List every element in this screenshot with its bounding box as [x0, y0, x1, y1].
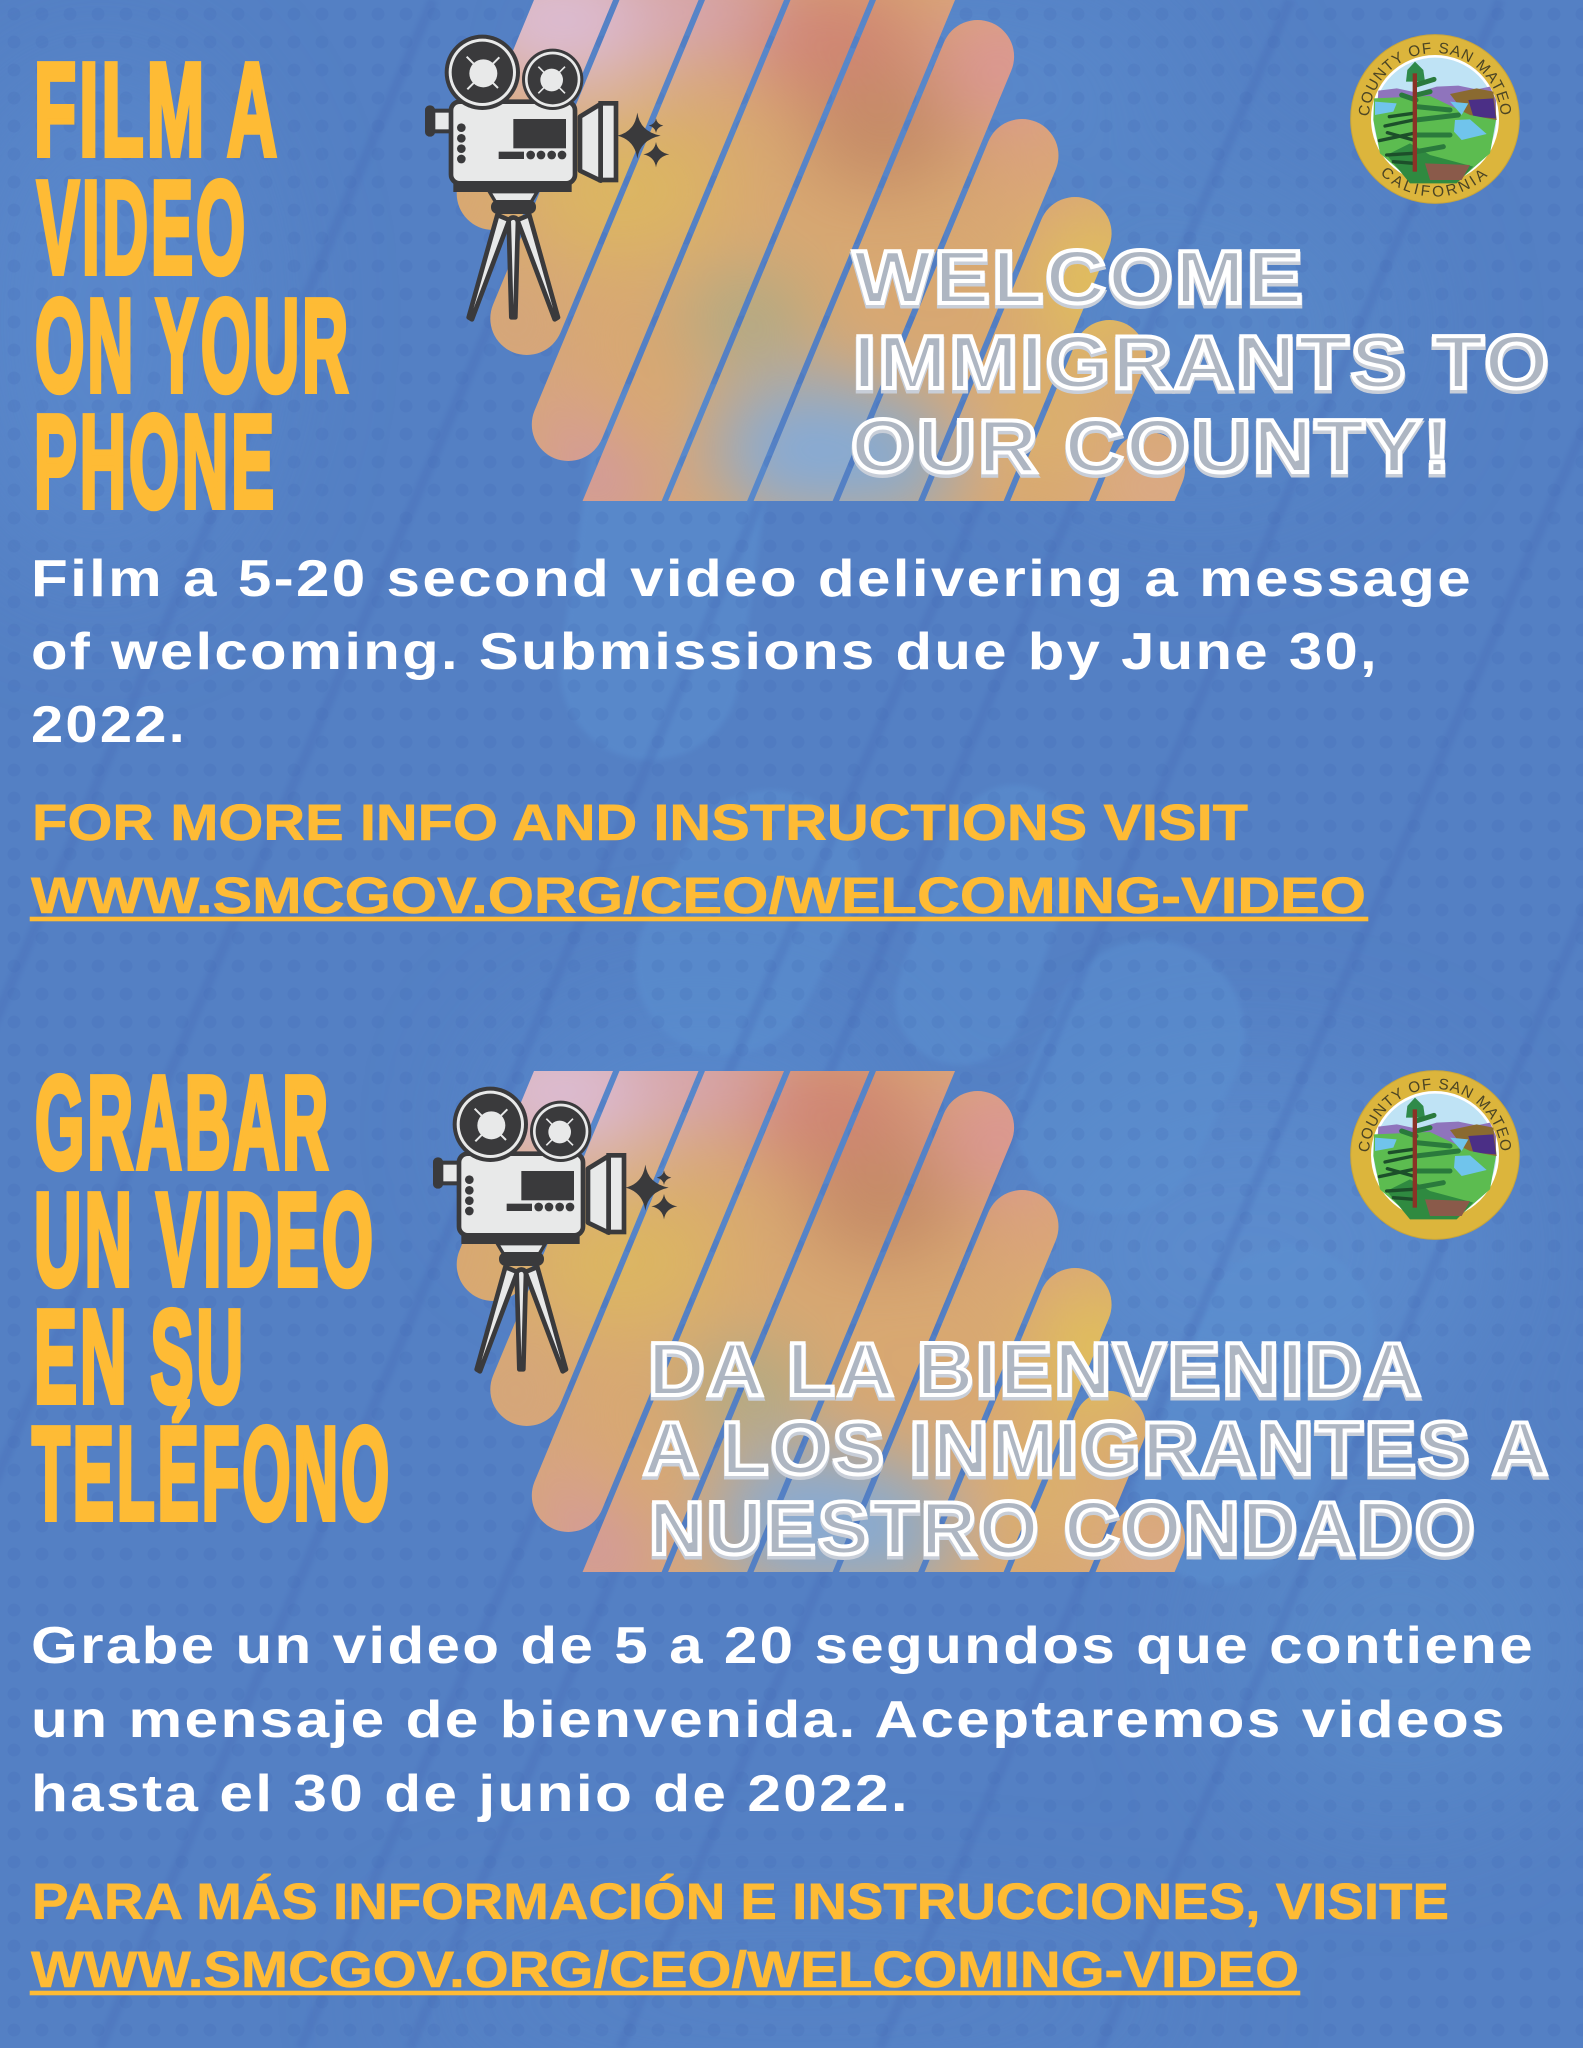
icon: movie camera bottom	[433, 1087, 677, 1371]
heading: da la bienvenida a los inmigrantes a nuestro condado: NUESTRO CONDADO	[649, 1489, 1477, 1573]
title: film a video on your phone: PHONE	[34, 388, 277, 535]
heading: welcome immigrants to our county: OUR COUNTY!	[851, 404, 1453, 488]
title: grabar un video en su telefono: EN SU	[34, 1283, 246, 1430]
info text: english: FOR MORE INFO AND INSTRUCTIONS VISIT	[32, 794, 1248, 851]
heading: welcome immigrants to our county: OUR COUNTY!	[851, 407, 1453, 491]
seal: county of san mateo top	[1350, 34, 1520, 204]
heading: welcome immigrants to our county: IMMIGRANTS TO	[853, 323, 1551, 407]
seal text: california: CALIFORNIA	[1269, 1043, 1391, 1060]
body text: english: Film a 5-20 second video delivering a message	[31, 550, 1473, 608]
heading: welcome immigrants to our county: WELCOME	[853, 238, 1305, 322]
seal text: county of san mateo: COUNTY OF SAN MATEO	[1358, 42, 1511, 116]
body text: spanish: un mensaje de bienvenida. Aceptaremos videos	[31, 1691, 1507, 1749]
body text: spanish	[31, 1617, 1535, 1823]
title: film a video on your phone: FILM A	[34, 36, 280, 183]
text: TELÉFONO	[32, 1400, 392, 1547]
heading: welcome immigrants to our county	[851, 235, 1551, 491]
link: english url: WWW.SMCGOV.ORG/CEO/WELCOMING-VIDEO	[31, 867, 1366, 924]
heading: welcome immigrants to our county: IMMIGRANTS TO	[853, 320, 1551, 404]
body text: english	[31, 550, 1473, 754]
heading: da la bienvenida a los inmigrantes a nuestro condado: A LOS INMIGRANTES A	[643, 1406, 1550, 1490]
heading: da la bienvenida a los inmigrantes a nuestro condado	[643, 1327, 1550, 1573]
title: grabar un video en su telefono: GRABAR	[35, 1049, 331, 1196]
body text: english: 2022.	[31, 696, 187, 754]
title: film a video on your phone	[34, 36, 351, 535]
text: ON YOUR	[35, 272, 351, 419]
stripes graphic: bottom	[404, 1021, 1254, 1601]
body text: english: of welcoming. Submissions due by June 30,	[31, 623, 1379, 681]
body text: spanish: hasta el 30 de junio de 2022.	[31, 1765, 910, 1823]
seal text: california: CALIFORNIA	[1382, 168, 1488, 197]
seal text: county of san mateo: COUNTY OF SAN MATEO	[1358, 1078, 1511, 1152]
heading: da la bienvenida a los inmigrantes a nuestro condado: NUESTRO CONDADO	[649, 1486, 1477, 1570]
body text: spanish: Grabe un video de 5 a 20 segundos que contiene	[31, 1617, 1535, 1675]
info text: spanish: PARA MÁS INFORMACIÓN E INSTRUCCIONES, VISITE	[32, 1873, 1449, 1930]
heading: da la bienvenida a los inmigrantes a nuestro condado: DA LA BIENVENIDA	[648, 1330, 1423, 1414]
link: spanish url: WWW.SMCGOV.ORG/CEO/WELCOMING-VIDEO	[31, 1941, 1299, 1998]
title: grabar un video en su telefono: UN VIDEO	[34, 1166, 376, 1313]
heading: da la bienvenida a los inmigrantes a nuestro condado: A LOS INMIGRANTES A	[643, 1409, 1550, 1493]
title: grabar un video en su telefono	[32, 1049, 392, 1547]
seal: county of san mateo bottom	[1350, 1070, 1520, 1240]
heading: welcome immigrants to our county: WELCOME	[853, 235, 1305, 319]
stripes graphic: top	[404, 0, 1254, 530]
icon: movie camera top	[425, 35, 669, 319]
title: film a video on your phone: VIDEO	[37, 154, 248, 301]
heading: da la bienvenida a los inmigrantes a nuestro condado: DA LA BIENVENIDA	[648, 1327, 1423, 1411]
